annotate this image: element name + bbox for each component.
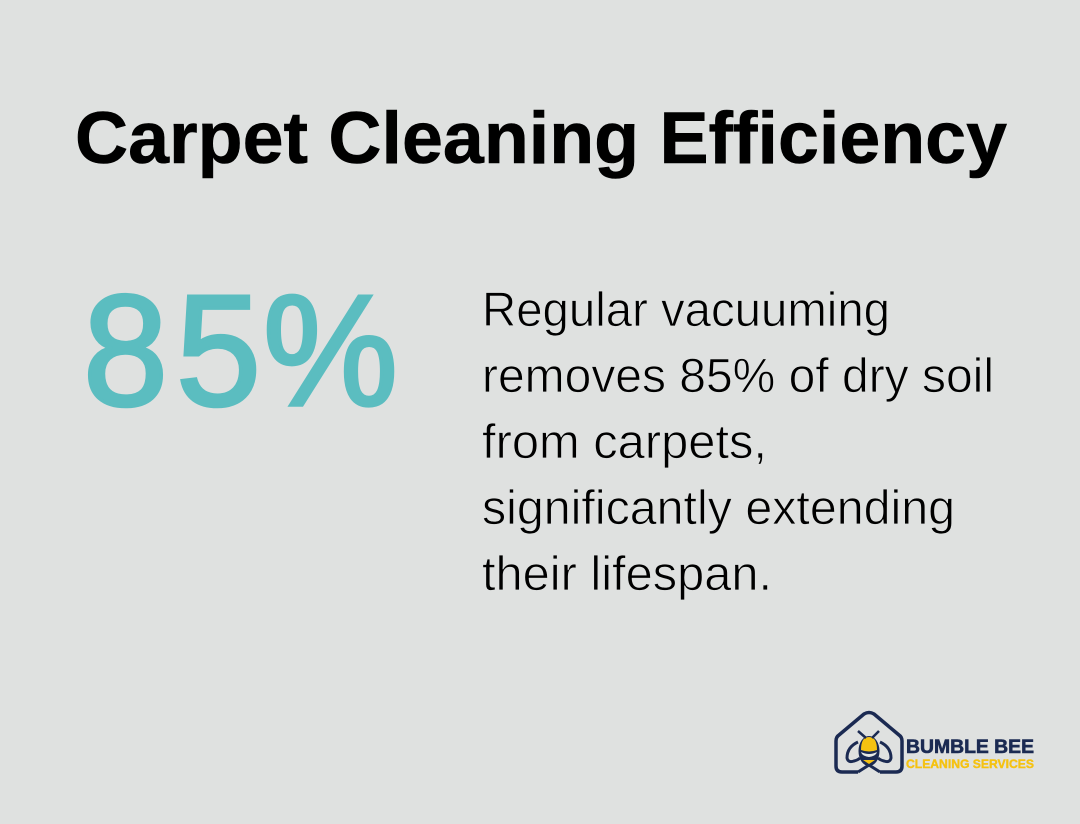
logo wordmark: BUMBLE BEE: [906, 737, 1034, 758]
title: Carpet Cleaning Efficiency: [75, 98, 1007, 179]
big statistic: 85%: %: [263, 263, 398, 439]
description text block: Regular vacuuming: [482, 284, 890, 337]
big statistic: 85%: 5: [176, 263, 261, 439]
big statistic: 85%: [83, 263, 398, 439]
logo tagline: CLEANING SERVICES: [906, 757, 1034, 771]
description text block: [482, 284, 994, 601]
description text block: significantly extending: [482, 482, 955, 535]
logo: Bumble Bee Cleaning Services: [836, 712, 1034, 772]
description text block: from carpets,: [482, 416, 767, 469]
description text block: removes 85% of dry soil: [482, 350, 994, 403]
description text block: their lifespan.: [482, 548, 772, 601]
icon: house outline with bee: [836, 712, 902, 772]
big statistic: 85%: 8: [83, 263, 168, 439]
